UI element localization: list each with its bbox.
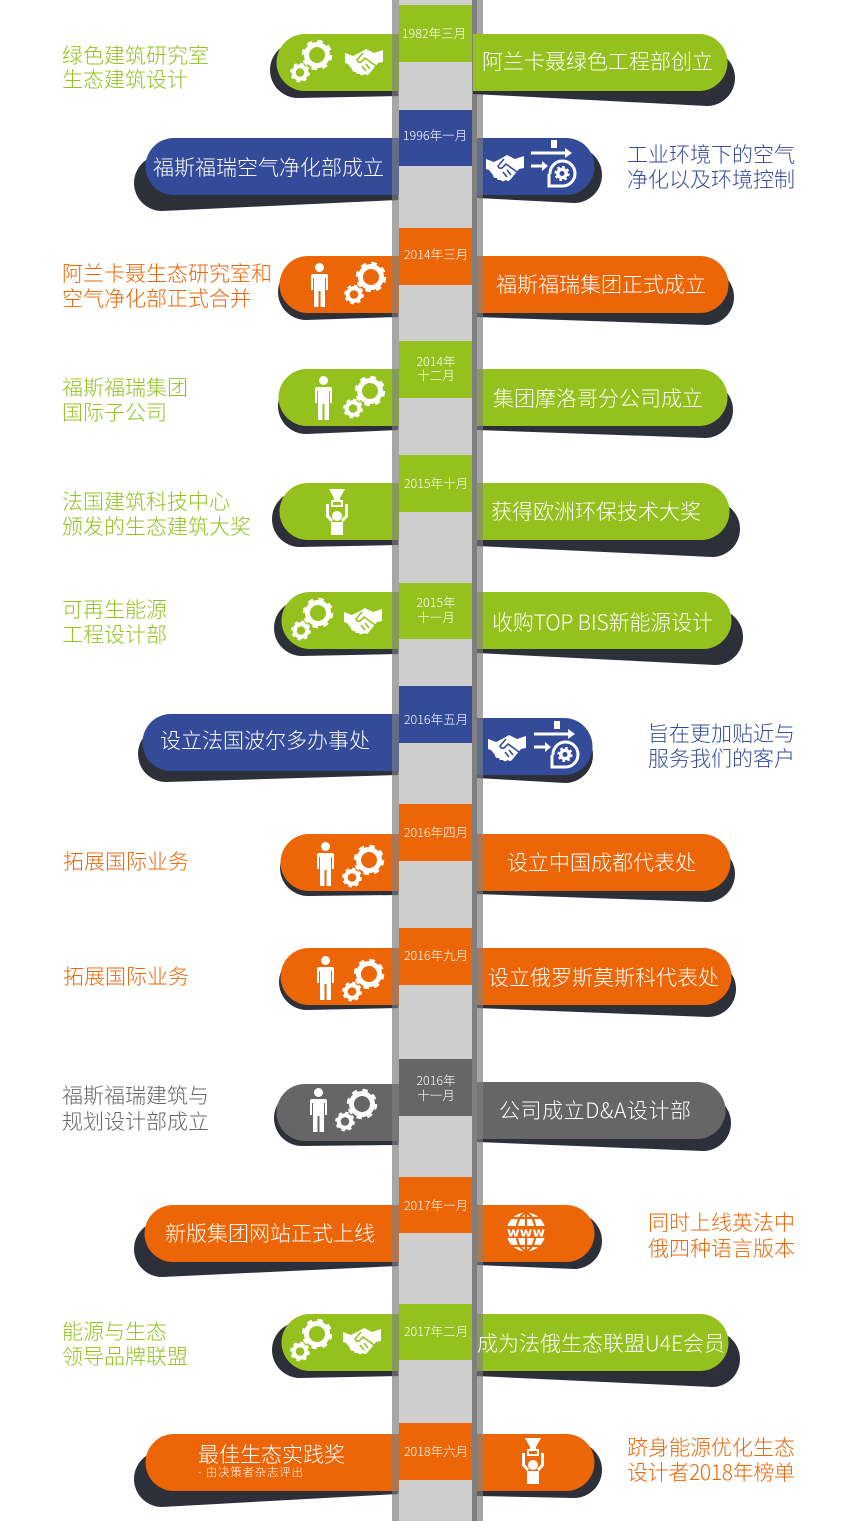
left shadow (279, 954, 398, 1010)
pill text: 收购TOP BIS新能源设计 (492, 607, 713, 637)
icon: person (315, 376, 332, 420)
icon: globe: www (507, 1226, 545, 1240)
side label: 跻身能源优化生态 (627, 1432, 795, 1462)
icon: handshake (488, 735, 526, 761)
pill text: 成为法俄生态联盟U4E会员 (477, 1328, 725, 1358)
pill text: 集团摩洛哥分公司成立 (493, 383, 703, 413)
date: 2014年三月 (404, 244, 468, 263)
pill text: 新版集团网站正式上线 (165, 1218, 375, 1248)
icon: person (317, 842, 334, 886)
side label (62, 486, 251, 541)
icon: handshake (486, 155, 524, 181)
rail tint (392, 483, 483, 546)
rail tint (392, 714, 483, 778)
rail tint (392, 34, 399, 96)
side label (627, 1432, 795, 1487)
side label: 能源与生态 (62, 1316, 167, 1346)
side label: 领导品牌联盟 (62, 1341, 188, 1371)
pill text: 公司成立D&A设计部 (499, 1095, 691, 1125)
right pill (477, 1205, 594, 1262)
icon: gears (292, 1321, 330, 1360)
milestone 2016 November (62, 1059, 731, 1151)
pill text: 获得欧洲环保技术大奖 (491, 496, 701, 526)
milestone 2017 February (62, 1304, 740, 1387)
icon: gears (344, 961, 382, 1000)
side label: 拓展国际业务 (63, 846, 189, 876)
date: 1982年三月 (402, 23, 466, 42)
right shadow (477, 1213, 602, 1269)
left pill (278, 369, 399, 426)
milestone 2017 January (134, 1177, 795, 1277)
date: 2018年六月 (404, 1441, 468, 1460)
side label: 工业环境下的空气 (627, 139, 795, 169)
side label (62, 1316, 188, 1371)
right pill (477, 718, 592, 775)
date box (399, 1059, 472, 1116)
date box (399, 341, 472, 398)
side label: 生态建筑设计 (62, 64, 188, 94)
milestone 1996 (134, 110, 795, 211)
date: 十二月 (417, 365, 455, 384)
side label: 工程设计部 (62, 619, 167, 649)
left pill (146, 1434, 399, 1491)
milestone 2015 October (62, 455, 740, 557)
rail tint (392, 1314, 483, 1376)
milestone 1982 (62, 5, 735, 106)
right pill (477, 948, 732, 1005)
date box (399, 928, 472, 985)
milestone 2015 November (62, 583, 743, 665)
side label (627, 139, 795, 194)
left pill (276, 34, 399, 91)
left pill (276, 1084, 399, 1141)
left shadow (270, 42, 398, 98)
left pill (280, 256, 399, 313)
right shadow (477, 501, 740, 557)
right shadow (477, 1095, 731, 1151)
pill text: 设立俄罗斯莫斯科代表处 (488, 962, 719, 992)
right shadow (477, 269, 734, 325)
milestone 2014 March (62, 228, 734, 325)
date box (399, 5, 472, 62)
date box (399, 455, 472, 512)
left shadow (278, 264, 398, 320)
right pill (477, 138, 594, 195)
right shadow (477, 609, 743, 665)
side label: 颁发的生态建筑大奖 (62, 511, 251, 541)
right shadow (477, 1331, 740, 1387)
right pill (477, 1434, 594, 1491)
icon: gears (346, 264, 384, 303)
side label: 国际子公司 (62, 397, 167, 427)
left shadow (272, 491, 398, 547)
icon: person (311, 263, 328, 307)
side label (62, 1080, 209, 1136)
date: 十一月 (417, 607, 455, 626)
left pill (282, 1314, 399, 1371)
rail tint (392, 1082, 483, 1145)
right shadow (473, 50, 735, 106)
date box (399, 1177, 472, 1233)
date (416, 592, 456, 626)
right pill (477, 1314, 728, 1371)
rail tint (392, 138, 483, 200)
right pill (477, 834, 730, 891)
side label: 绿色建筑研究室 (62, 40, 209, 70)
side label: 俄四种语言版本 (648, 1233, 795, 1263)
date box (399, 804, 472, 861)
rail tint (392, 1205, 483, 1266)
date: 2015年十月 (404, 473, 468, 492)
timeline rail (392, 0, 483, 1521)
date (416, 351, 456, 384)
icon: person (310, 1088, 327, 1132)
date: 2015年 (416, 592, 456, 611)
left shadow (138, 726, 398, 782)
side label (62, 372, 188, 427)
side label: 法国建筑科技中心 (62, 486, 230, 516)
side label (62, 594, 167, 649)
date box (399, 1304, 472, 1360)
left pill (280, 834, 399, 891)
pill text: 设立法国波尔多办事处 (160, 725, 370, 755)
date: 2017年二月 (404, 1321, 468, 1340)
side label: 设计者2018年榜单 (627, 1457, 795, 1487)
date box (399, 228, 472, 285)
icon: trophy person (524, 1438, 542, 1484)
date box (399, 583, 472, 639)
milestone 2016 May (138, 686, 795, 783)
right pill (477, 483, 730, 540)
side label: 净化以及环境控制 (627, 164, 795, 194)
rail tint (392, 369, 483, 430)
left pill (282, 592, 399, 649)
date box (399, 1423, 472, 1480)
left shadow (134, 1451, 398, 1507)
side label (62, 40, 209, 94)
icon: trophy person (328, 489, 346, 535)
left shadow (278, 378, 398, 434)
milestone 2014 December (62, 341, 733, 438)
right shadow (477, 382, 733, 438)
side label: 旨在更加贴近与 (648, 718, 795, 748)
icon: handshake (344, 608, 382, 634)
icon: handshake (345, 49, 383, 75)
side label (648, 1207, 795, 1263)
date (416, 1070, 456, 1104)
right shadow (477, 727, 593, 783)
side label: 规划设计部成立 (62, 1106, 209, 1136)
pill text: 设立中国成都代表处 (507, 847, 696, 877)
pill text: 福斯福瑞集团正式成立 (496, 269, 706, 299)
right pill (473, 34, 728, 91)
date: 2016年四月 (404, 822, 468, 841)
right shadow (477, 846, 735, 902)
left shadow (274, 600, 398, 656)
icon: globe (506, 1212, 546, 1252)
rail tint (392, 948, 483, 1008)
side label: 福斯福瑞集团 (62, 372, 188, 402)
rail tint (392, 1434, 483, 1496)
icon: gears (344, 847, 382, 886)
icon: blower (534, 721, 578, 767)
pill text: 阿兰卡聂绿色工程部创立 (482, 46, 713, 76)
rail tint (392, 256, 483, 317)
side label: 可再生能源 (62, 594, 167, 624)
milestone 2016 April (63, 804, 735, 902)
icon: handshake (343, 1328, 381, 1354)
icon: gears (344, 378, 383, 417)
pill text: 最佳生态实践奖 (198, 1439, 345, 1469)
icon: gears (292, 42, 330, 81)
icon: person (317, 956, 334, 1000)
pill text: 福斯福瑞空气净化部成立 (153, 152, 384, 182)
pill text: - 由决策者杂志评出 (198, 1464, 303, 1480)
milestone 2018 June (134, 1423, 795, 1507)
date box (399, 686, 472, 743)
rail tint (392, 592, 483, 654)
side label: 空气净化部正式合并 (62, 283, 251, 313)
side label (62, 258, 272, 313)
side label: 阿兰卡聂生态研究室和 (62, 258, 272, 288)
side label: 服务我们的客户 (648, 743, 795, 773)
left pill (142, 714, 399, 771)
left pill (280, 483, 399, 540)
icon: blower (531, 140, 575, 186)
date: 十一月 (417, 1085, 455, 1104)
right pill (477, 369, 728, 426)
left pill (144, 1205, 399, 1262)
date: 2016年五月 (404, 709, 468, 728)
right shadow (477, 147, 602, 203)
date box (399, 110, 472, 166)
left pill (280, 948, 399, 1005)
side label: 福斯福瑞建筑与 (62, 1080, 209, 1110)
rail tint (392, 834, 483, 895)
icon: gears (292, 600, 331, 639)
side label (648, 718, 795, 773)
left shadow (274, 1090, 398, 1146)
date: 2016年 (416, 1070, 456, 1089)
left shadow (134, 1221, 398, 1277)
right pill (477, 592, 732, 649)
right pill (477, 1082, 726, 1139)
date: 2017年一月 (404, 1195, 468, 1214)
side label: 拓展国际业务 (63, 961, 189, 991)
right pill (477, 256, 728, 313)
right shadow (477, 961, 736, 1017)
side label: 同时上线英法中 (648, 1207, 795, 1237)
right shadow (477, 1442, 602, 1498)
left shadow (272, 1322, 398, 1378)
icon: gears (336, 1091, 375, 1130)
date: 2016年九月 (404, 945, 468, 964)
left shadow (280, 840, 398, 896)
left pill (146, 138, 399, 195)
date: 2014年 (416, 351, 456, 370)
milestone 2016 September (63, 928, 736, 1017)
date: 1996年一月 (403, 125, 467, 144)
left shadow (134, 155, 398, 211)
